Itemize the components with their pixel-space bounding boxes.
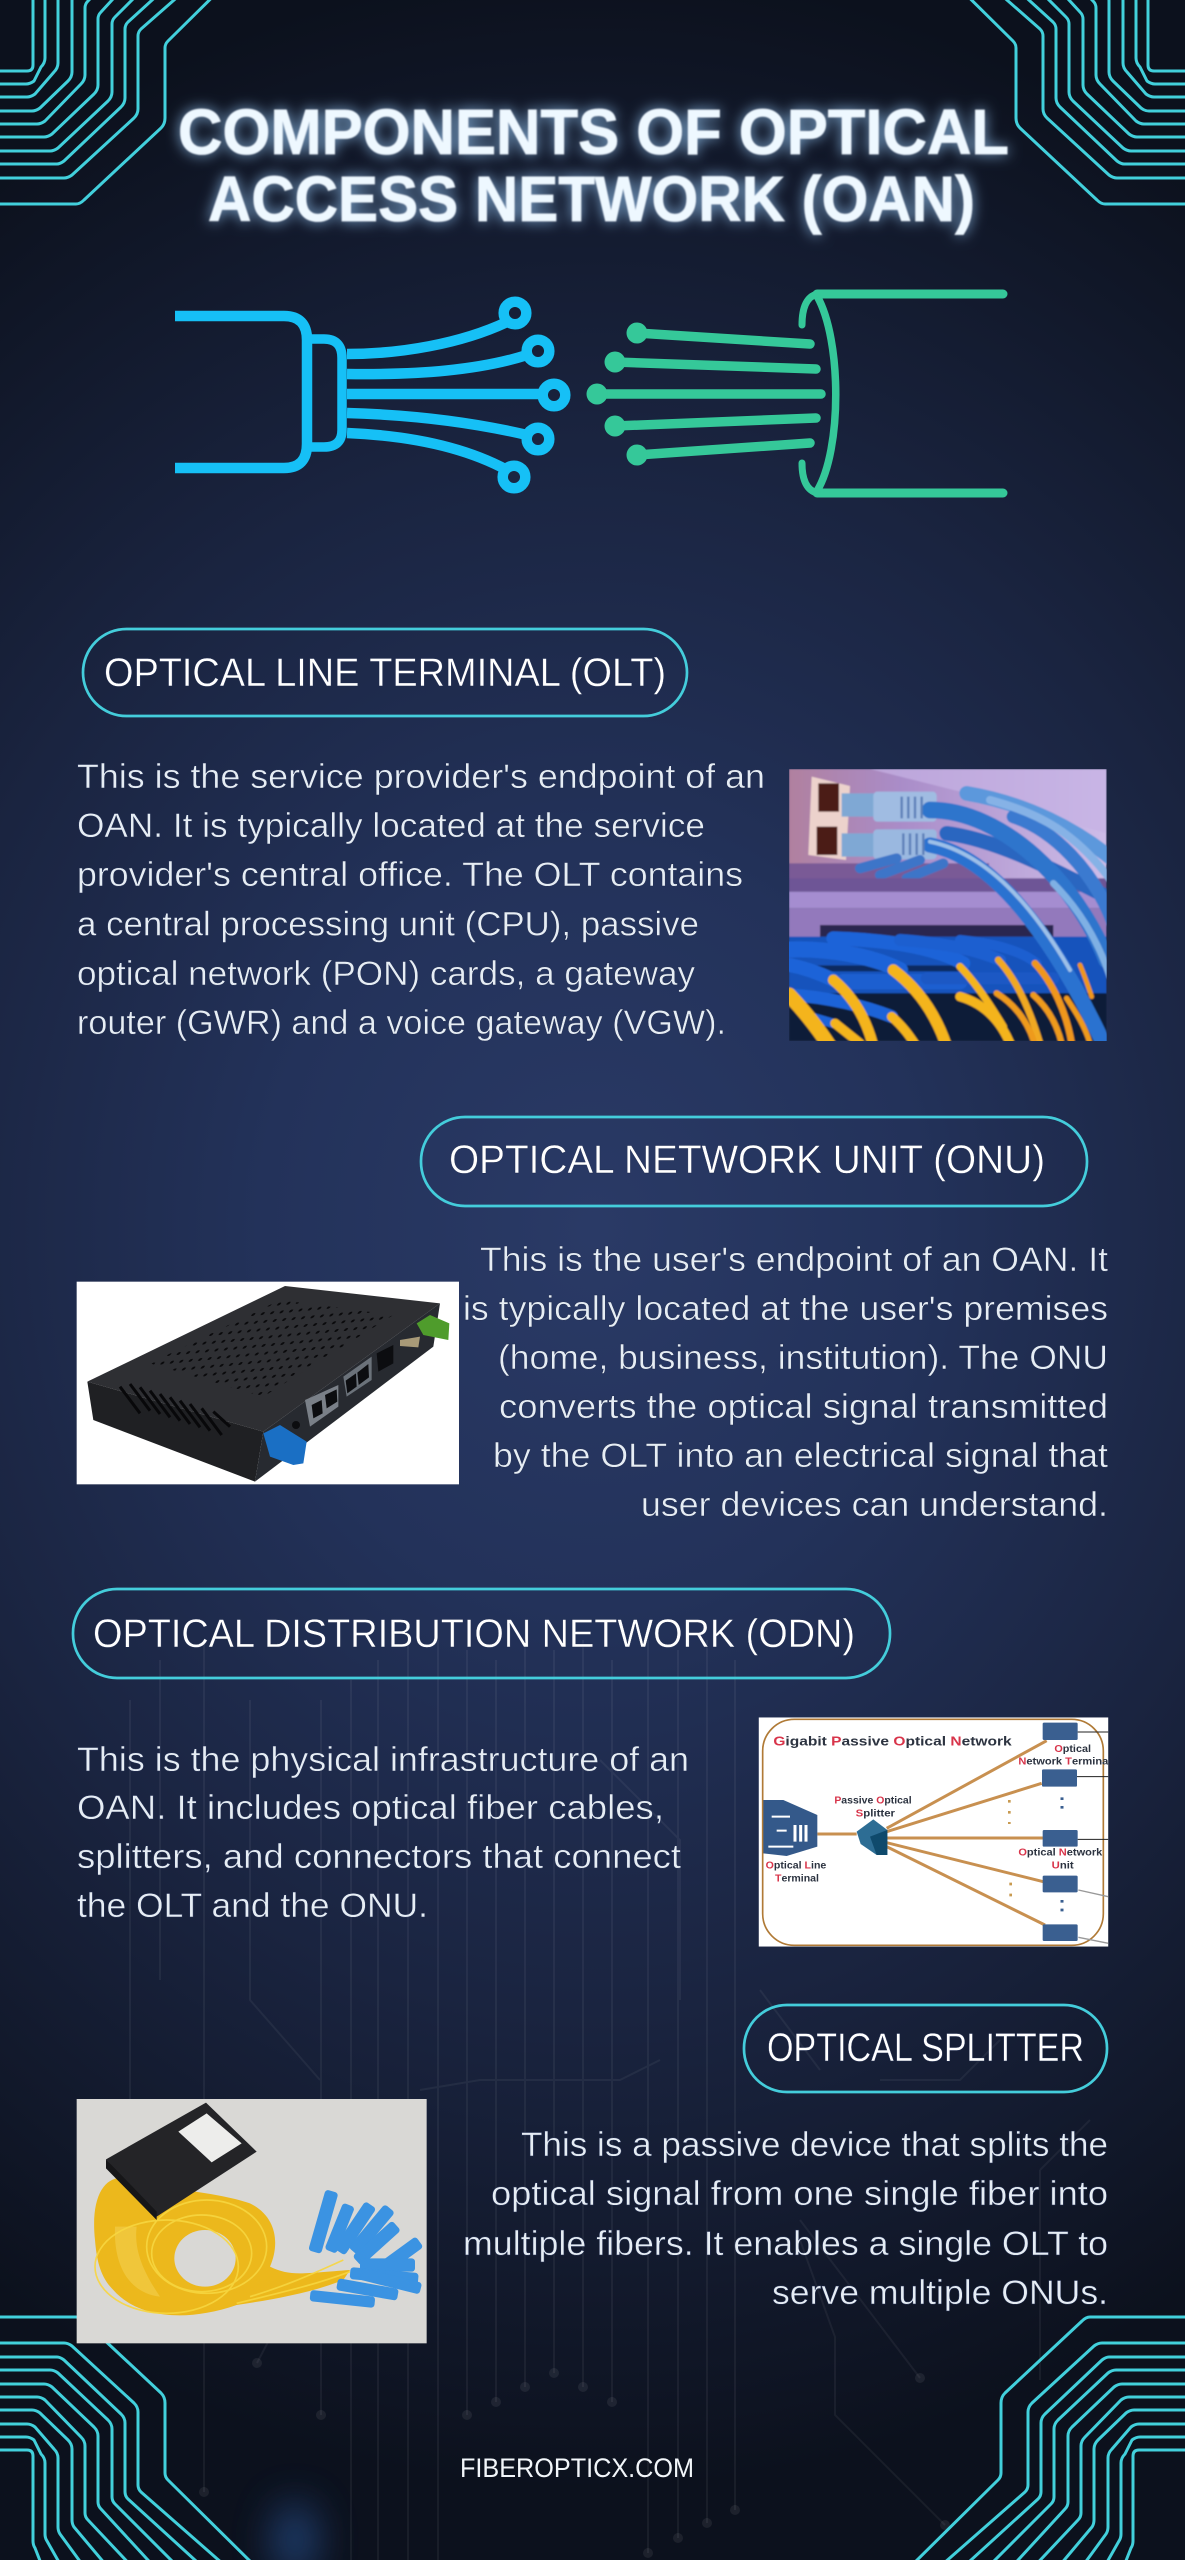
text block: OLT description [77,758,765,1042]
image: gigabit passive optical network diagram [759,1717,1109,1947]
text block: ONU description: This is the user's endpoint of an OAN. It [480,1241,1108,1279]
text block: OLT description: OAN. It is typically located at the service [77,807,705,845]
title [178,96,1009,235]
text block: splitter description [463,2126,1108,2312]
text block: ONU description: (home, business, institution). The ONU [498,1339,1108,1377]
heading pill: optical splitter [744,2005,1107,2092]
image: optical network unit device [77,1282,459,1484]
heading pill: OLT: OPTICAL LINE TERMINAL (OLT) [104,651,666,695]
text block: ONU description: converts the optical signal transmitted [499,1388,1108,1426]
title: COMPONENTS OF OPTICAL [178,96,1009,168]
text block: splitter description: This is a passive device that splits the [521,2126,1108,2164]
image: gigabit passive optical network diagram: Splitter [856,1808,895,1819]
circuit lines: top right corner [921,0,1185,204]
image: gigabit passive optical network diagram: Terminal [775,1873,819,1884]
heading pill: ODN [73,1589,890,1678]
image: gigabit passive optical network diagram: Gigabit Passive Optical Network [773,1734,1012,1749]
heading pill: ONU: OPTICAL NETWORK UNIT (ONU) [449,1138,1045,1182]
text block: ODN description: OAN. It includes optical fiber cables, [77,1789,664,1827]
text block: ONU description: by the OLT into an electrical signal that [493,1437,1108,1475]
image: patch cables in network rack [780,769,1113,1047]
text block: splitter description: multiple fibers. It enables a single OLT to [463,2225,1108,2263]
image: gigabit passive optical network diagram: Optical Network [1018,1847,1103,1858]
background circuit pattern [130,1640,1090,2560]
circuit lines: bottom right corner [906,2317,1185,2560]
text block: splitter description: serve multiple ONUs. [772,2274,1108,2312]
footer website text: FIBEROPTICX.COM [460,2453,694,2483]
text block: ONU description: is typically located at the user's premises [463,1290,1108,1328]
image: gigabit passive optical network diagram: Unit [1052,1860,1075,1871]
heading pill: ODN: OPTICAL DISTRIBUTION NETWORK (ODN) [93,1612,855,1656]
heading pill: ONU [421,1117,1087,1206]
text block: OLT description: optical network (PON) cards, a gateway [77,955,696,993]
text block: ODN description: This is the physical infrastructure of an [77,1741,689,1779]
text block: ODN description: splitters, and connectors that connect [77,1838,681,1876]
text block: OLT description: a central processing unit (CPU), passive [77,906,699,944]
heading pill: optical splitter: OPTICAL SPLITTER [767,2026,1084,2070]
circuit lines: bottom left corner [0,2317,260,2560]
heading pill: OLT [83,629,687,716]
circuit lines: top left corner [0,0,260,204]
image: gigabit passive optical network diagram: Optical [1054,1744,1091,1755]
text block: OLT description: router (GWR) and a voice gateway (VGW). [77,1004,726,1042]
icon: blue fiber optic cable [175,302,565,488]
text block: ODN description: the OLT and the ONU. [77,1887,428,1925]
text block: OLT description: provider's central office. The OLT contains [77,856,743,894]
text block: ONU description: user devices can understand. [641,1486,1108,1524]
text block: splitter description: optical signal from one single fiber into [491,2175,1108,2213]
text block: ONU description [463,1241,1108,1524]
image: gigabit passive optical network diagram: Network Termina [1018,1756,1109,1767]
image: gigabit passive optical network diagram: Optical Line [766,1860,827,1871]
icon: green fiber optic cable [586,294,1003,493]
image: gigabit passive optical network diagram: Passive Optical [834,1795,912,1806]
image: optical splitter with yellow fibers [77,2099,427,2343]
bottom glow [273,2502,317,2560]
text block: OLT description: This is the service provider's endpoint of an [77,758,765,796]
text block: ODN description [77,1741,689,1925]
title: ACCESS NETWORK (OAN) [208,163,975,235]
